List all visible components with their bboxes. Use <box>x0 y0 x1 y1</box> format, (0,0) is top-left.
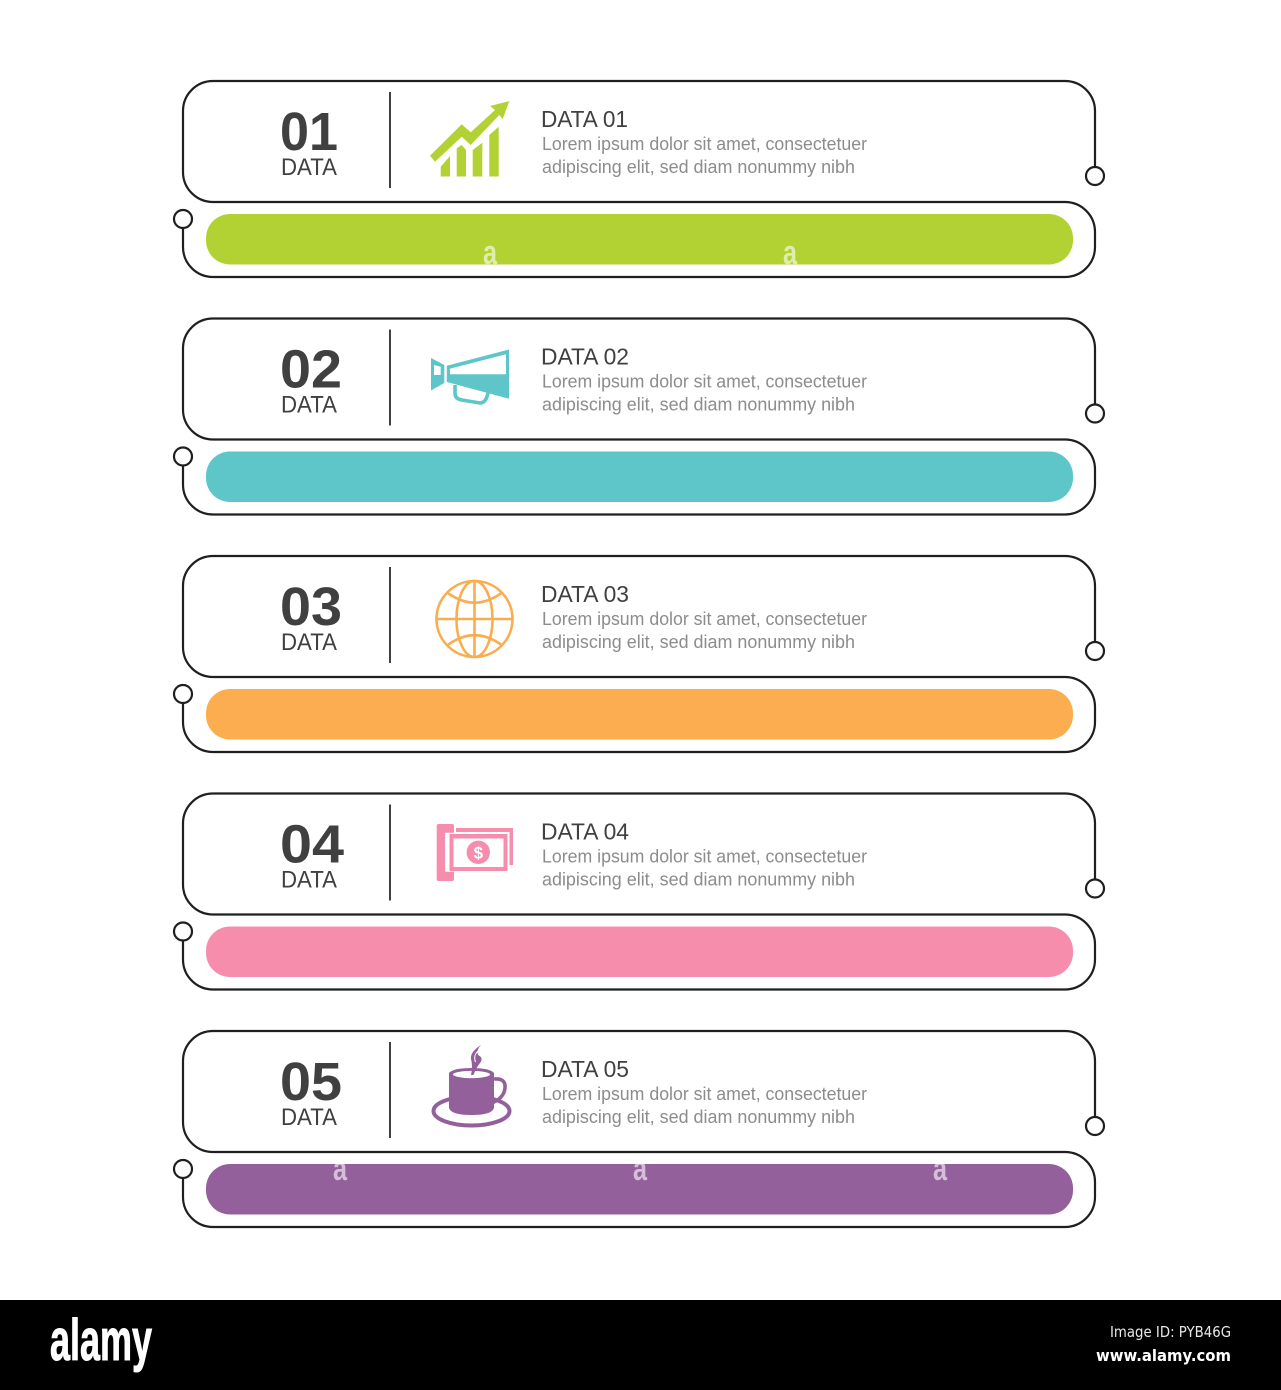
icon: coffee cup on saucer <box>434 1045 510 1126</box>
number 04: 04 <box>280 814 344 874</box>
heading DATA 03: DATA 03 <box>541 581 629 607</box>
body text 04: Lorem ipsum dolor sit amet, consectetuer <box>542 846 867 866</box>
watermark traces on bar 05 <box>333 1150 948 1188</box>
body text 04: adipiscing elit, sed diam nonummy nibh <box>542 870 855 890</box>
label DATA 05: DATA <box>281 1104 337 1131</box>
heading DATA 02: DATA 02 <box>541 344 629 370</box>
body text 02: Lorem ipsum dolor sit amet, consectetuer <box>542 372 867 392</box>
panel: row 05 <box>174 1031 1104 1227</box>
body text 02 <box>542 372 867 414</box>
colour bar 04 <box>206 926 1073 977</box>
colour bar 05 <box>206 1164 1073 1214</box>
watermark traces on bar 01 <box>483 234 798 272</box>
connector frame 01 <box>174 81 1104 277</box>
vertical divider 02 <box>389 330 391 426</box>
vertical divider 03 <box>389 567 391 663</box>
alamy logo wordmark: alamy <box>50 1308 152 1373</box>
panel: row 01 <box>174 81 1104 277</box>
icon: banknotes with dollar sign <box>437 824 513 881</box>
connector frame 02 <box>174 318 1104 514</box>
footer band <box>0 1300 1281 1390</box>
icon: rising bar chart with arrow <box>430 101 509 176</box>
body text 02: adipiscing elit, sed diam nonummy nibh <box>542 394 855 414</box>
body text 05: adipiscing elit, sed diam nonummy nibh <box>542 1107 855 1127</box>
label DATA 03: DATA <box>281 629 337 656</box>
icon: banknotes with dollar sign: $ <box>474 844 484 862</box>
number 05: 05 <box>280 1052 342 1112</box>
label DATA 04: DATA <box>281 866 337 894</box>
body text 03 <box>542 609 867 652</box>
body text 01 <box>542 134 867 177</box>
watermark traces on bar 05: a <box>333 1150 348 1188</box>
body text 01: adipiscing elit, sed diam nonummy nibh <box>542 157 855 177</box>
body text 03: Lorem ipsum dolor sit amet, consectetuer <box>542 609 867 629</box>
colour bar 03 <box>206 689 1073 740</box>
colour bar 02 <box>206 452 1073 502</box>
watermark traces on bar 05: a <box>933 1150 948 1188</box>
icon: megaphone <box>431 350 509 403</box>
vertical divider 01 <box>389 92 391 188</box>
watermark traces on bar 01: a <box>783 234 798 272</box>
heading DATA 05: DATA 05 <box>541 1056 629 1082</box>
heading DATA 01: DATA 01 <box>541 106 628 132</box>
label DATA 01: DATA <box>281 154 337 181</box>
colour bar 01 <box>206 214 1073 264</box>
image id: Image ID: PYB46G <box>1110 1323 1231 1341</box>
icon: globe <box>436 581 512 657</box>
panel: row 02 <box>174 318 1104 514</box>
body text 05: Lorem ipsum dolor sit amet, consectetuer <box>542 1084 867 1104</box>
website url: www.alamy.com <box>1096 1346 1231 1365</box>
panel: row 04 <box>174 794 1104 990</box>
connector frame 03 <box>174 556 1104 752</box>
number 03: 03 <box>280 577 342 637</box>
body text 03: adipiscing elit, sed diam nonummy nibh <box>542 632 855 652</box>
vertical divider 04 <box>389 804 391 900</box>
watermark traces on bar 01: a <box>483 234 498 272</box>
number 01: 01 <box>280 102 338 162</box>
connector frame 04 <box>174 794 1104 990</box>
body text 01: Lorem ipsum dolor sit amet, consectetuer <box>542 134 867 154</box>
vertical divider 05 <box>389 1042 391 1138</box>
body text 05 <box>542 1084 867 1127</box>
panel: row 03 <box>174 556 1104 752</box>
label DATA 02: DATA <box>281 392 337 418</box>
watermark traces on bar 05: a <box>633 1150 648 1188</box>
connector frame 05 <box>174 1031 1104 1227</box>
heading DATA 04: DATA 04 <box>541 818 629 844</box>
body text 04 <box>542 846 867 890</box>
number 02: 02 <box>280 340 342 400</box>
